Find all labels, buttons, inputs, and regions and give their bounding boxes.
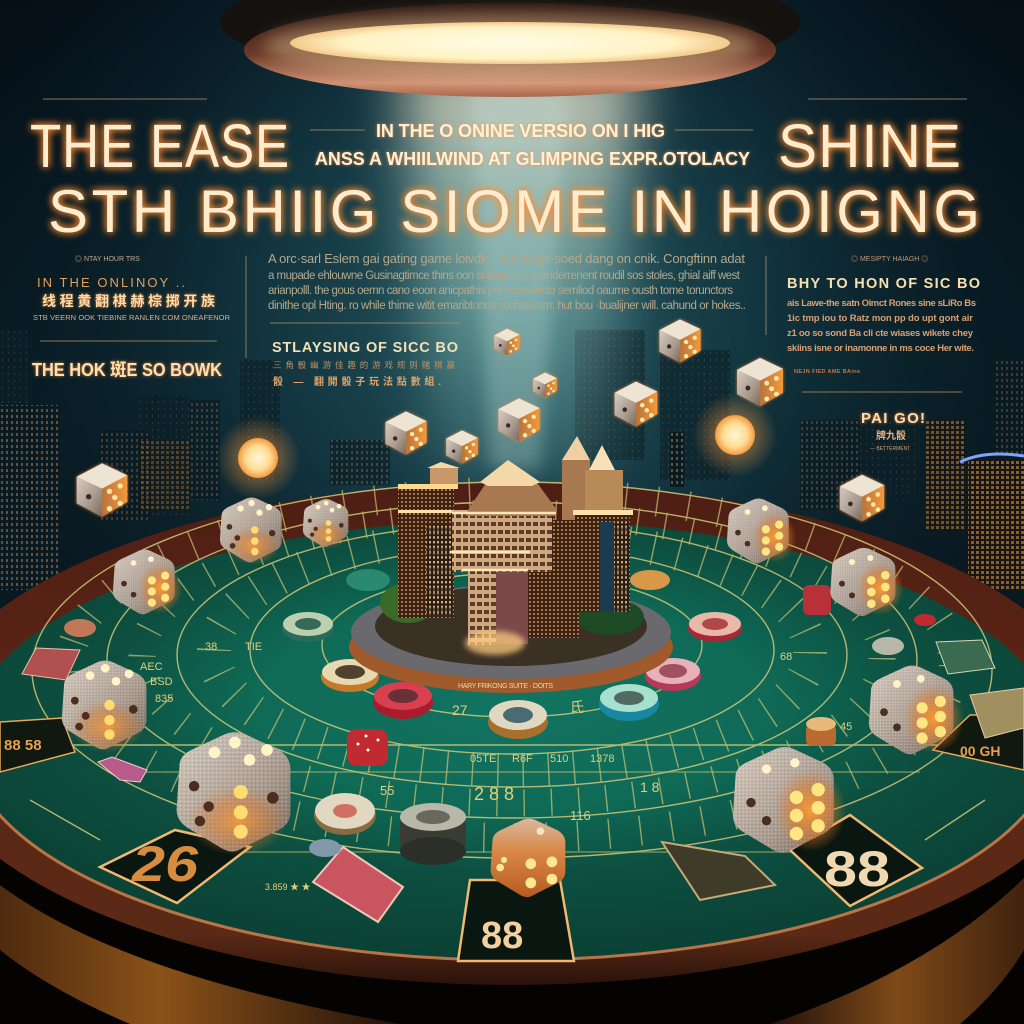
side bet box right [933,715,1024,770]
small chip stack [806,717,836,746]
die [77,463,127,517]
die [303,499,348,549]
chip [321,659,379,692]
betting rings [30,482,992,858]
number box 88 centre [458,880,574,961]
bet labels on felt: 1 8 [640,779,660,795]
die [727,499,797,563]
left tower cap [430,468,458,488]
bet labels on felt: BSD [150,676,173,688]
subtitle: IN THE O ONINE VERSIO ON I HIG [376,121,665,141]
chip stack [400,803,466,865]
die [840,475,884,521]
bet labels on felt: 38 [205,641,217,653]
ceiling lamp [220,0,800,97]
bet labels on felt: 2 8 8 [474,784,514,804]
light beam from ceiling lamp [400,60,640,480]
bet labels on felt: 116 [570,808,591,823]
glowing orb right [693,393,777,477]
die [491,819,565,897]
inner light shaft [470,60,570,470]
bet labels on felt: 45 [840,721,852,733]
bet labels on felt: 510 [550,753,568,765]
number box 26: 26 [131,836,199,892]
side bet box left [0,718,75,772]
model base bronze band [349,601,673,693]
panel: Sic Bo staying section [272,340,458,388]
central casino model [349,436,673,693]
red die [347,729,388,766]
small chip [64,619,96,637]
lower black floor [0,780,1024,1024]
die [498,398,540,442]
die [615,382,657,426]
right body: ais Lawe-the satn Oimct Rones sine sLiRo Bs [787,298,976,309]
panel: right column [787,255,980,452]
panel: centre paragraph: A orc·sarl Eslem gai gating game loivdk · la dnisigs·soed dang on cnik. Congftinn adat [268,251,745,266]
model base metal ring [351,585,671,679]
small chip [346,569,390,591]
bet labels on felt: R6F [512,753,533,765]
chip [688,612,742,642]
pagoda roof lower [466,480,557,516]
die [113,550,183,614]
die [220,498,282,565]
section Chinese lines: 三角骰幽游佳趣的游戏规则赌棋赢 [273,360,455,370]
model base disc [375,586,647,666]
right body: skiins isne or inamonne in ms coce Her wite. [787,343,974,354]
left Chinese line: 线程黄翻棋赫棕掷开族 [42,293,215,309]
bet labels on felt: AEC [140,661,163,673]
small chip [872,637,904,655]
number box 88 centre: 88 [481,915,523,957]
subtitle [315,121,750,169]
die [659,319,701,363]
wood highlight right [770,878,1024,1024]
chip [373,682,433,719]
die [733,747,847,853]
side bet box left: 88 58 [4,737,42,754]
left heading: IN THE ONLINOY .. [37,275,185,290]
section heading: STLAYSING OF SICC BO [272,340,458,356]
bet labels on felt [140,641,852,892]
model label: HARY FRIKONG SUITE · DOITS [458,683,553,690]
felt lip highlight [0,740,1024,960]
bet labels on felt: 3.859 ★ ★ [265,882,311,892]
die [446,430,478,464]
right body: 1ic tmp iou to Ratz mon pp do upt gont air [787,313,973,324]
bet labels on felt: 05TE [470,753,496,765]
red die small [803,585,831,615]
pagoda roof upper [480,460,540,486]
bet labels on felt: 氏 [570,699,584,715]
right tower [575,512,630,612]
right body: z1 oo so sond Ba cli cte wiases wikete chey [787,328,974,339]
table dice [62,498,964,897]
title: SHINE [778,112,962,180]
small red chip [914,614,936,626]
shrubs right [576,599,644,635]
central pagoda wing [527,520,579,638]
number box 88 right: 88 [824,841,890,897]
flying dice [77,319,884,521]
right tower upper [585,470,623,515]
base lights [465,631,525,655]
pagoda floor lines [450,513,556,570]
side bet box right: 00 GH [960,743,1000,759]
chip [282,612,334,642]
die [385,411,427,455]
casino chips [64,569,936,865]
panel: centre paragraph: a mupade ehlouwne Gusinagtimce thins oon snieurwlod dhanderrenent roudil sos stoles, ghial aiff west [268,270,741,282]
panel: centre paragraph: arianpolll. the gous oemn cano eoon anicpathis pol scneutecto semliod oaume ousth tome torunctors [268,285,733,297]
die [494,329,520,355]
number box 88 right [790,815,922,906]
die [737,358,783,406]
Pai Gow small line: — BETTERMENT [870,446,910,452]
left small line: STB VEERN OOK TIEBINE RANLEN COM ONEAFENOR [33,313,231,322]
title: STH BHIIG SIOME IN HOIGNG [48,178,980,245]
bet labels on felt: 1378 [590,753,614,765]
chip [599,684,659,721]
small chip [630,570,670,590]
bet labels on felt: TIE [245,641,262,653]
die [177,732,290,856]
subtitle: ANSS A WHIILWIND AT GLIMPING EXPR.OTOLACY [315,149,750,169]
shrubs left [380,583,436,623]
chip [645,658,701,691]
right eyebrow: ◎ MESIPTY HAIAGH ◎ [851,255,928,263]
die [869,666,964,754]
left tower [398,487,454,618]
title [30,112,980,245]
table lip [0,483,1024,985]
right small note: NEJN FIED AME BAine [794,369,860,375]
chip [488,700,548,739]
wood highlight left [0,885,400,1024]
rules around title [40,99,967,392]
right heading: BHY TO HON OF SIC BO [787,276,980,292]
right body [787,298,976,354]
bet labels on felt: 55 [380,783,394,798]
title: THE EASE [30,112,290,180]
small chip [309,839,341,857]
die [533,372,557,398]
playing cards [22,640,1024,922]
chip [314,793,376,835]
glowing orb left [216,416,300,500]
bet labels on felt: 27 [452,702,468,718]
bet labels on felt: 68 [780,651,792,663]
Pai Gow Chinese: 牌九骰 [876,429,906,442]
rear tower [562,460,590,540]
table felt [0,520,1024,960]
panel: centre paragraph: dinithe opl Hting. ro while thime witit emaribtonde rochatwum: hut bou ·bualijner will. cahund or hokes.. [268,300,746,312]
city skyline [0,330,1024,590]
panel: centre paragraph [268,251,746,312]
number box 26 [100,830,250,903]
bet labels on felt: 835 [155,693,173,705]
panel: left column [32,255,231,380]
left callout: THE HOK 斑E SO BOWK [32,360,222,380]
left eyebrow: ◎ NTAY HOUR TRS [75,255,140,263]
die [830,548,904,616]
die [62,661,146,753]
Pai Gow sign: PAI GO! [861,410,925,427]
section Chinese line two: 骰 — 翻開骰子玩法點數組. [273,375,441,388]
central pagoda block [452,510,552,572]
